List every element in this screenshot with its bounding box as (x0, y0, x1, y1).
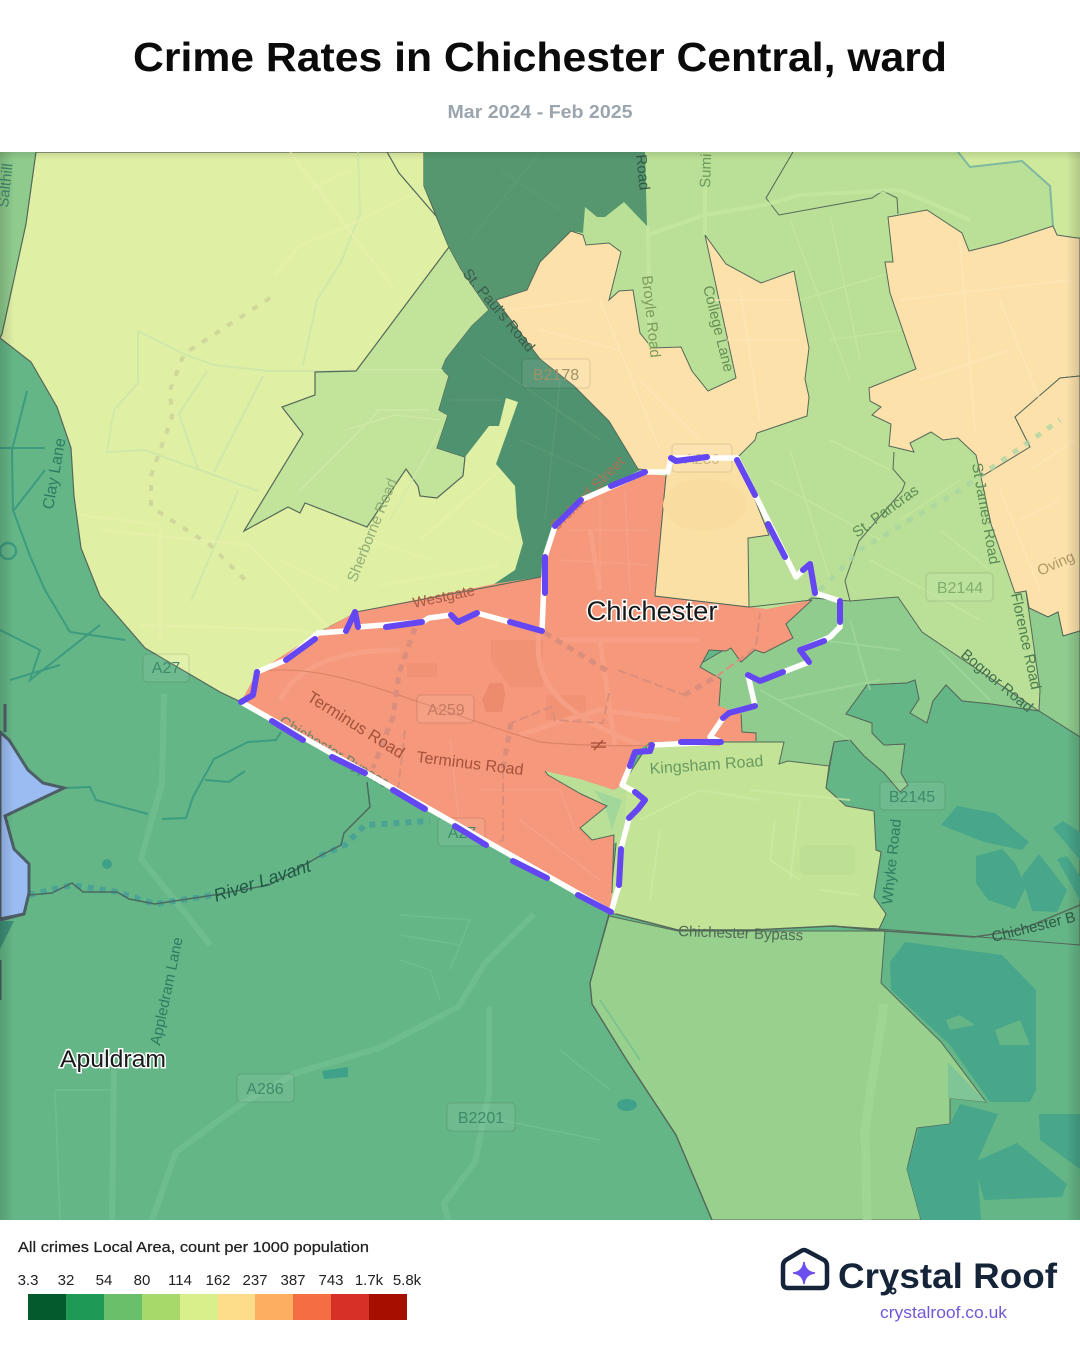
legend values (18, 1272, 422, 1289)
area: east peach (869, 210, 1080, 477)
pond (102, 859, 112, 869)
line: Chichester bypass (590, 905, 1080, 1220)
west pale streets (80, 152, 510, 640)
north-east pale streets (647, 187, 970, 348)
road labels: River Lavant (211, 855, 314, 906)
road labels: St. Pancras (849, 482, 922, 541)
west streams and roads (107, 152, 360, 601)
town pale roads (280, 530, 700, 745)
area: west pale yellow-green (0, 152, 541, 702)
road labels: Florence Road (1007, 591, 1044, 691)
south-east pale road (865, 1004, 884, 1220)
area: Chichester Central red (241, 473, 812, 914)
centre peach block (663, 479, 747, 531)
streams near harbour (65, 732, 281, 819)
legend (18, 1239, 422, 1320)
town blocks (407, 640, 586, 720)
road labels: B2201 (458, 1110, 504, 1127)
road labels: A259 (427, 702, 465, 719)
legend values: 743 (318, 1272, 344, 1289)
legend values: 3.3 (18, 1272, 38, 1289)
road shields (143, 359, 993, 1131)
boundary purple dashes (241, 457, 840, 912)
road labels: A286 (246, 1081, 284, 1098)
road labels: St. Paul's Road (459, 266, 538, 355)
brand name: Crystal Roof (838, 1257, 1057, 1296)
ring marker (0, 543, 16, 559)
west light green streets (300, 370, 450, 520)
south-west thin streets (55, 915, 640, 1220)
line: north-west boundary (387, 152, 436, 216)
area: top right outline (766, 152, 898, 215)
dark green streets (450, 152, 610, 520)
base area: south-west green (0, 152, 1080, 1220)
road labels: Terminus Road (304, 688, 408, 762)
area: top-right pale (958, 152, 1080, 238)
road labels: Chichester Bypass (276, 713, 392, 792)
road labels: Sherborne Road (344, 476, 401, 584)
place label: Chichester: Chichester (586, 596, 718, 626)
area: south-east light green (590, 916, 986, 1220)
south-west roads (112, 694, 534, 1220)
dotted path: St Pancras (810, 420, 1060, 600)
east peach streets (900, 240, 1075, 590)
area: far east peach (981, 376, 1080, 636)
centre peach (655, 457, 769, 607)
north peach streets (510, 290, 800, 450)
boundary white casing (241, 458, 840, 912)
mid green streets (760, 620, 990, 740)
area: dark green St Paul's (437, 300, 640, 584)
road labels: Road (632, 154, 653, 191)
area: north peach (496, 231, 809, 472)
small water blob (322, 1067, 348, 1079)
south-east lakes (890, 942, 1080, 1220)
water (0, 732, 64, 919)
town thin streets (450, 490, 650, 880)
road labels: Whyke Road (879, 818, 905, 905)
Kingsham block (800, 845, 855, 875)
west streams (0, 391, 125, 680)
dotted path: river lavant (29, 821, 430, 904)
area: north-west corner green (0, 152, 36, 335)
road labels: A27 (448, 825, 476, 842)
Kingsham pale streets and blocks (640, 790, 860, 900)
road labels: Sumi (697, 153, 715, 188)
legend title: All crimes Local Area, count per 1000 population (18, 1239, 369, 1256)
y key ring (890, 1288, 896, 1294)
dashed thin paths in town (398, 613, 760, 845)
area: dark green north (424, 152, 647, 310)
harbour edge dark (0, 704, 24, 1000)
dotted footpath: west (151, 298, 270, 581)
lake islands (946, 1015, 1030, 1045)
road labels: Chichester Bypass (678, 923, 803, 944)
area: west light green (244, 247, 489, 531)
road labels (0, 153, 1077, 1127)
legend values: 114 (168, 1272, 192, 1289)
map edge shading (0, 152, 1080, 1220)
river lavant (29, 782, 370, 904)
cathedral building (482, 683, 505, 712)
road labels: Bognor Road (957, 646, 1036, 716)
ward boundary (241, 457, 840, 912)
road labels: B2178 (533, 367, 579, 384)
road labels: Chichester B (990, 909, 1077, 946)
road labels: A286 (684, 451, 720, 468)
road labels: B2144 (937, 580, 983, 597)
road labels: Kingsham Road (649, 753, 764, 778)
road labels: Westgate (411, 582, 477, 612)
road labels: Appledram Lane (147, 936, 187, 1047)
north-east thin streets (770, 215, 990, 620)
top-right dotted edge (958, 152, 1053, 226)
title: Crime Rates in Chichester Central, ward (133, 34, 947, 80)
road labels: Orchard Street (547, 453, 629, 535)
road labels: St James Road (968, 462, 1003, 566)
legend values: 5.8k (393, 1272, 422, 1289)
harbour teal (0, 921, 14, 949)
legend values: 387 (280, 1272, 306, 1289)
area: green notch (540, 765, 626, 846)
legend values: 54 (96, 1272, 112, 1289)
red outline (356, 476, 812, 893)
area: far east mid green (1026, 591, 1080, 737)
road labels: A27 (152, 660, 180, 677)
website: crystalroof.co.uk (880, 1304, 1008, 1322)
legend values: 237 (242, 1272, 268, 1289)
legend values: 80 (134, 1272, 150, 1289)
road labels: Clay Lane (40, 437, 69, 511)
road labels: Oving (1035, 548, 1077, 580)
area: east mid green (695, 597, 1039, 792)
logo (783, 1250, 1057, 1322)
east lakes (941, 806, 1080, 912)
rail station icon (591, 740, 606, 750)
notch park (594, 790, 622, 830)
subtitle: date range: Mar 2024 - Feb 2025 (448, 102, 632, 122)
legend colour scale (28, 1294, 407, 1320)
line: St Pancras boundary (748, 452, 905, 601)
road labels: College Lane (699, 284, 737, 374)
icon: house with star (783, 1250, 827, 1288)
area: east darker green (826, 680, 1080, 945)
area: Kingsham light green (609, 742, 886, 930)
road labels: Terminus Road (416, 749, 524, 779)
legend values: 32 (58, 1272, 74, 1289)
legend values: 1.7k (355, 1272, 384, 1289)
road labels: B2145 (889, 789, 935, 806)
south-east patch (948, 1062, 986, 1102)
area: north-east light green (575, 152, 1080, 740)
legend values: 162 (205, 1272, 231, 1289)
choropleth map (0, 152, 1080, 1220)
railway line (255, 670, 720, 746)
small water blob south (617, 1099, 637, 1111)
road labels: Broyle Road (638, 275, 664, 359)
place label: Apuldram: Apuldram (60, 1046, 166, 1073)
dashed paths in town (373, 628, 716, 770)
